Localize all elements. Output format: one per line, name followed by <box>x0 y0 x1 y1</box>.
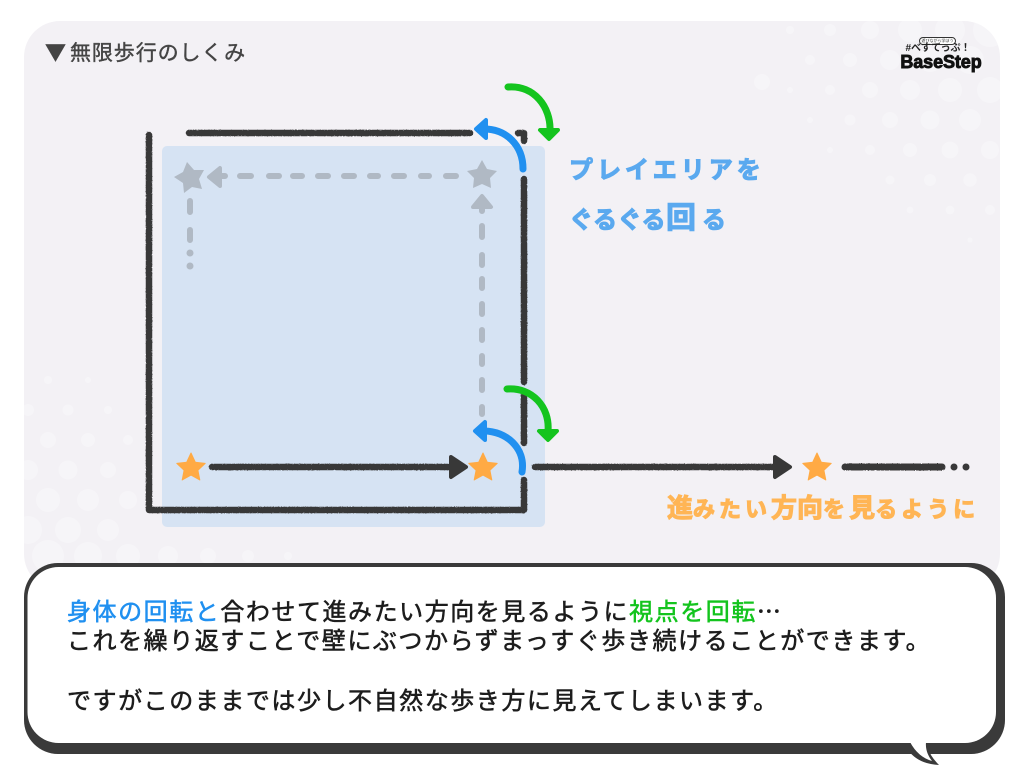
heading <box>45 37 246 67</box>
label: look in desired direction: 進みたい方向を見るように <box>667 493 979 523</box>
label: play area rotates: プレイエリアを <box>569 157 765 184</box>
bubble text line 3: ですがこのままでは少し不自然な歩き方に見えてしまいます。 <box>67 688 779 715</box>
bubble text line 2: これを繰り返すことで壁にぶつからずまっすぐ歩き続けることができます。 <box>67 628 931 655</box>
logo: BaseStep <box>900 37 982 72</box>
green turn arrow top <box>508 87 558 139</box>
background panel with halftone dots <box>24 21 1000 576</box>
heading: 無限歩行のしくみ <box>70 42 246 65</box>
blue turn arrow top <box>476 120 523 169</box>
continuing line and dots <box>845 464 970 470</box>
room walls <box>149 133 524 510</box>
gray star: far corner <box>174 162 204 193</box>
bubble text line 1: 身体の回転と合わせて進みたい方向を見るように視点を回転… <box>67 592 782 627</box>
gray trailing dots <box>186 250 194 270</box>
heading: ▼ <box>45 37 67 67</box>
play area <box>162 146 545 527</box>
gray star: turn corner <box>467 160 497 188</box>
walking arrow outside room <box>535 457 790 477</box>
logo: BaseStep: 遊びながら学ぼう <box>922 38 954 43</box>
logo: BaseStep: BaseStep <box>900 52 982 72</box>
gray dashed past path <box>190 176 482 414</box>
green turn arrow bottom <box>507 389 557 440</box>
walking arrow inside room <box>212 457 466 477</box>
blue turn arrow bottom <box>475 422 523 472</box>
label: round and round: ぐるぐる回る <box>569 202 727 235</box>
orange stars <box>177 453 831 480</box>
gray arrowheads <box>209 168 491 207</box>
logo: BaseStep: #べすてっぷ！ <box>905 43 971 54</box>
